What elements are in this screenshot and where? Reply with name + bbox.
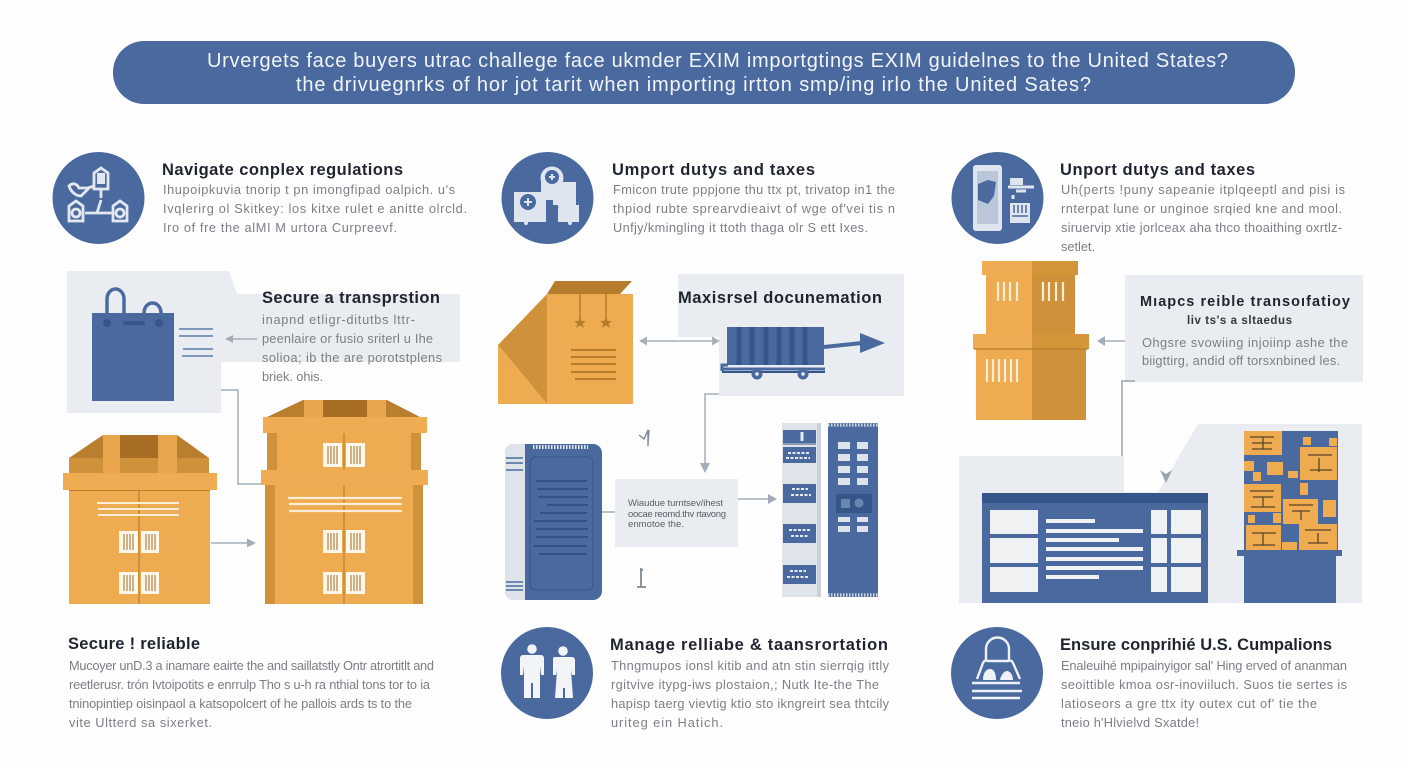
icon: two people <box>501 627 593 719</box>
box: stacked cartons <box>973 261 1089 420</box>
text block: import duties 1: Unfjy/kmingling it ttoth thaga olr S ett Ixes. <box>613 220 868 235</box>
text block: manage reliable: rgitvive itypg-iws plostaion,; Nutk Ite-the The <box>611 677 879 692</box>
text block: ensure compliance: seoittible kmoa osr-inoviiluch. Suos tie sertes is <box>1061 677 1347 692</box>
text block: import duties 2 <box>1060 161 1345 254</box>
connector arrow <box>700 394 719 473</box>
icon: regulations network <box>52 152 144 244</box>
text block: manage reliable <box>610 636 890 730</box>
text block: secure reliable: reetlerusr. trón Ivtoipotits e enrrulp Tho s u-h ra nthial tons tor to ia <box>69 677 431 692</box>
icon: mobile device <box>952 152 1044 244</box>
callout: centre note: Wiaudue turntsev/ihest <box>628 498 723 509</box>
text block: briek. ohis. <box>262 369 323 384</box>
text block: import duties 2: Uh(perts !puny sapeanie itplqeeptl and pisi is <box>1061 182 1345 197</box>
text block: import duties 1: Fmicon trute pppjone thu ttx pt, trivatop in1 the <box>613 182 895 197</box>
text block: manage reliable: uriteg ein Hatich. <box>611 715 723 730</box>
text block: navigate regulations: Ivqlerirg ol Skitkey: los kitxe rulet e anitte olrcld. <box>163 201 467 216</box>
connector <box>602 511 615 513</box>
panel: secure a transportation <box>67 271 460 413</box>
arrow: double headed <box>639 336 720 346</box>
connector <box>1122 381 1135 456</box>
text block: secure reliable: Mucoyer unD.3 a inamare eairte the and saillatstly Ontr atrortitlt and <box>69 658 434 673</box>
text block: import duties 1 <box>612 161 895 235</box>
text block: navigate regulations: Ihupoipkuvia tnorip t pn imongfipad oalpich. u's <box>163 182 455 197</box>
text block: import duties 1: Umport dutys and taxes <box>612 161 815 179</box>
text block: Secure a transprstion <box>262 289 440 307</box>
box: open carton <box>498 281 633 404</box>
small mark lower <box>637 568 646 587</box>
text block: ensure compliance: Ensure conprihié U.S. Cumpalions <box>1060 636 1332 654</box>
connector <box>221 390 262 484</box>
arrow head <box>1160 470 1172 483</box>
strip with labels <box>782 423 821 597</box>
panel: reliable transportation <box>1125 275 1363 382</box>
icon: padlock compliance <box>951 627 1043 719</box>
bin with cartons collage <box>1237 431 1342 603</box>
callout: centre note: enmotoe the. <box>628 519 684 530</box>
panel: lower right backdrop <box>959 424 1362 603</box>
text block: secure reliable: tninopintiep oisinpaol a katsopolcert of he pallois ards ts to the <box>69 696 412 711</box>
panel: maximise documentation <box>678 274 904 396</box>
panel: reliable transportation: biigttirg, andid off torsxnbined les. <box>1142 353 1340 368</box>
arrow <box>738 494 777 504</box>
panel: reliable transportation: Mıapcs reible transoıfatioy <box>1140 294 1350 310</box>
text block: manage reliable: hapisp taerg vievtig ktio sto ikngreirt sea thtcily <box>611 696 890 711</box>
text block: manage reliable: Manage relliabe & taansrortation <box>610 636 888 654</box>
text block: ensure compliance: latioseors a gre ttx ity outex cut of' tie the <box>1061 696 1317 711</box>
text block: inapnd etligr-ditutbs lttr- <box>262 312 415 327</box>
document binder <box>505 444 602 600</box>
text block: manage reliable: Thngmupos ionsl kitib and atn stin sierrqig ittly <box>611 658 890 673</box>
text block: navigate regulations: Iro of fre the alMI M urtora Curpreevf. <box>163 220 397 235</box>
text block: import duties 2: setlet. <box>1061 239 1095 254</box>
box: left shipping carton <box>63 435 217 604</box>
arrow <box>211 538 256 548</box>
arrow <box>1097 336 1125 346</box>
text block <box>262 289 442 384</box>
text block: peenlaire or fusio sriterl u Ihe <box>262 331 433 346</box>
text block: import duties 2: Unport dutys and taxes <box>1060 161 1255 179</box>
box: right shipping carton <box>261 400 428 604</box>
text block: solioa; ib the are porotstplens <box>262 350 442 365</box>
panel: reliable transportation: liv ts's a sltaedus <box>1187 315 1292 327</box>
control tower panel <box>828 423 878 597</box>
panel: maximise documentation: Maxisrsel docunemation <box>678 289 882 307</box>
icon: shopping bag <box>92 289 174 401</box>
title banner: the drivuegnrks of hor jot tarit when importing irtton smp/ing irlo the United Sates? <box>296 74 1091 96</box>
text block: navigate regulations <box>162 161 467 235</box>
text block: import duties 2: rnterpat lune or unginoe srqied kne and mool. <box>1061 201 1342 216</box>
text block: navigate regulations: Navigate conplex regulations <box>162 161 403 179</box>
panel: reliable transportation: Ohgsre svowiing injoiinp ashe the <box>1142 335 1348 350</box>
title banner: Urvergets face buyers utrac challege face ukmder EXIM importgtings EXIM guidelnes to the United States? <box>207 50 1228 72</box>
arrow <box>225 335 257 343</box>
text block: secure reliable <box>68 635 434 730</box>
text block: secure reliable: vite Ultterd sa sixerket. <box>69 715 212 730</box>
text block: ensure compliance: tneio h'Hlvielvd Sxatde! <box>1061 715 1199 730</box>
icon: duties packages <box>502 152 594 244</box>
text block: ensure compliance <box>1060 636 1347 730</box>
dashboard screen <box>982 493 1208 603</box>
small mark upper <box>639 430 649 446</box>
icon: freight trailer <box>722 327 885 380</box>
text block: import duties 1: thpiod rubte sprearvdieaivt of wge of'vei tis n <box>613 201 895 216</box>
text block: secure reliable: Secure ! reliable <box>68 635 200 653</box>
callout: centre note: oocae reomd.thv rtavong <box>628 509 726 520</box>
text block: import duties 2: siruervip xtie jorlceax aha thco thoaithing oxrtlz- <box>1061 220 1342 235</box>
text block: ensure compliance: Enaleuihé mpipainyigor sal' Hing erved of ananman <box>1061 658 1347 673</box>
callout: centre note <box>615 479 738 547</box>
title banner <box>113 41 1295 104</box>
